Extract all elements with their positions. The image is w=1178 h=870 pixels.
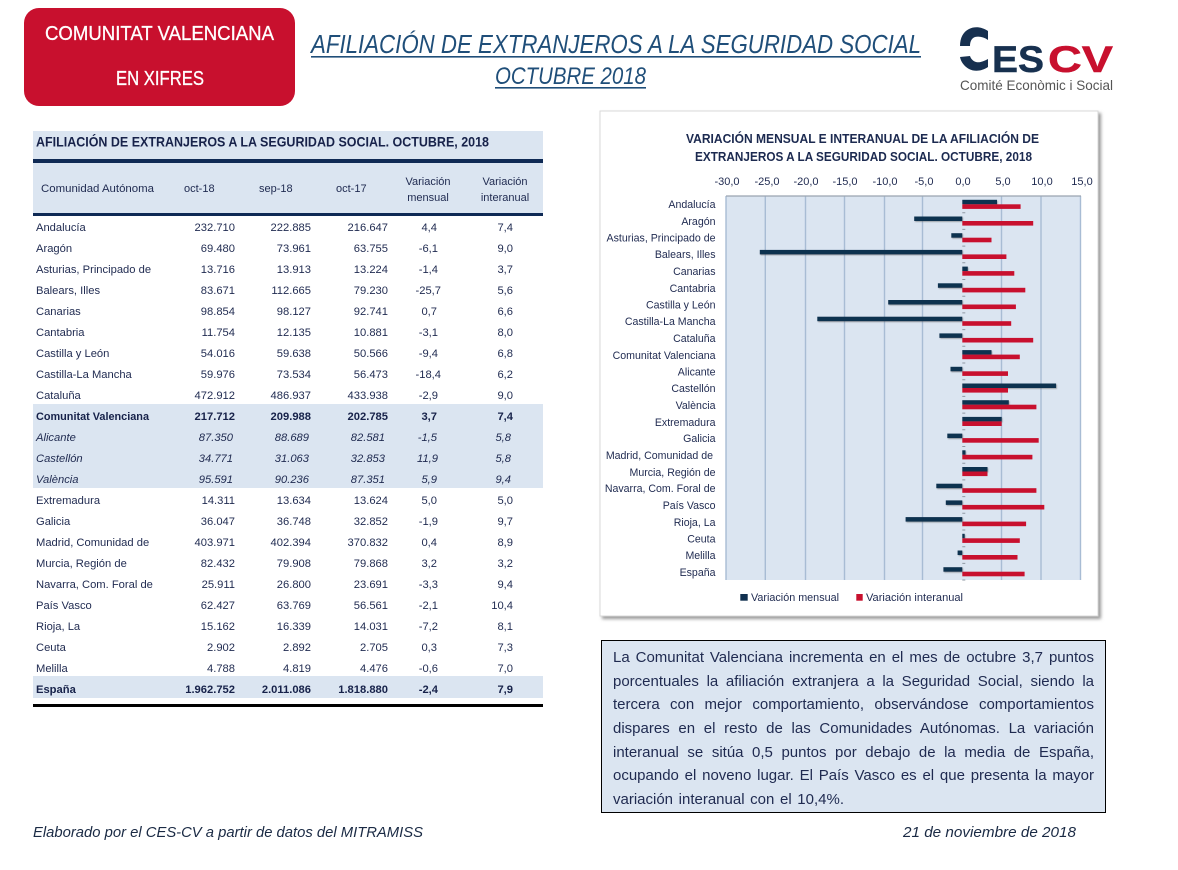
x axis labels: [714, 176, 1093, 188]
row: España: 2.011.086: [262, 684, 311, 696]
x axis labels: -30,0: [714, 176, 740, 188]
row: Balears: -25,7: [416, 285, 441, 297]
row: Castellón: 5,8: [495, 453, 512, 465]
row: Murcia: Murcia, Región de: [36, 558, 127, 570]
panel: data table: [33, 131, 543, 707]
row: Cantabria: 12.135: [277, 327, 311, 339]
row: Castellón: [36, 453, 512, 465]
row: Balears: 83.671: [201, 285, 235, 297]
table column headers: Variación: [405, 176, 451, 188]
category labels: Asturias, Principado de: [607, 232, 716, 244]
category labels: [605, 199, 716, 579]
row: Galicia: 36.047: [201, 516, 235, 528]
logo: CES-CV: ES: [992, 39, 1044, 80]
row: Asturias: [36, 264, 513, 276]
row: Asturias: 13.716: [201, 264, 235, 276]
title: [309, 29, 921, 90]
row: València: València: [36, 474, 78, 486]
table column headers: interanual: [481, 192, 529, 204]
row: Alicante: 88.689: [275, 432, 309, 444]
row: Madrid: Madrid, Comunidad de: [36, 537, 149, 549]
x axis labels: -25,0: [754, 176, 780, 188]
row: Aragón: 9,0: [497, 243, 513, 255]
row: Balears: 112.665: [271, 285, 311, 297]
row: Alicante: 82.581: [351, 432, 385, 444]
row: Balears: Balears, Illes: [36, 285, 100, 297]
row: Canarias: 0,7: [421, 306, 437, 318]
text block: commentary: interanual se sitúa 0,5 puntos por debajo de la media de España,: [613, 744, 1094, 761]
row: Castilla y León: 59.638: [277, 348, 311, 360]
row: Ceuta: 7,3: [497, 642, 513, 654]
row: Navarra: [36, 579, 513, 591]
row: Rioja: Rioja, La: [36, 621, 81, 633]
row: Cantabria: 11.754: [202, 327, 235, 339]
row: Castilla-La Mancha: 73.534: [277, 369, 311, 381]
row: Madrid: 0,4: [421, 537, 437, 549]
row: Castilla y León: 54.016: [201, 348, 235, 360]
row: Cataluña: 486.937: [271, 390, 311, 402]
row: Galicia: 36.748: [277, 516, 311, 528]
row: Cantabria: -3,1: [419, 327, 438, 339]
row: Castilla y León: 6,8: [497, 348, 513, 360]
row: Murcia: 82.432: [201, 558, 235, 570]
category labels: Alicante: [678, 366, 716, 378]
row: Castilla y León: Castilla y León: [36, 348, 109, 360]
row: València: 95.591: [199, 474, 233, 486]
x axis labels: -20,0: [793, 176, 819, 188]
row: Rioja: 15.162: [201, 621, 235, 633]
row: Asturias: Asturias, Principado de: [36, 264, 151, 276]
row: España: -2,4: [419, 684, 439, 696]
category labels: Aragón: [681, 216, 716, 228]
x axis labels: 10,0: [1031, 176, 1053, 188]
table column headers: mensual: [407, 192, 449, 204]
row: Asturias: 13.913: [277, 264, 311, 276]
row: Rioja: -7,2: [419, 621, 438, 633]
row: Andalucía: 4,4: [421, 222, 437, 234]
plot background and grid: [726, 196, 1081, 580]
text block: commentary: dispares en el resto de las Comunidades Autónomas. La variación: [613, 720, 1094, 737]
row: Canarias: 6,6: [497, 306, 513, 318]
table column headers: Comunidad Autónoma: [41, 183, 155, 195]
row: Galicia: -1,9: [419, 516, 438, 528]
row: Melilla: Melilla: [36, 663, 68, 675]
row: Canarias: [36, 306, 513, 318]
row: Castellón: 34.771: [199, 453, 233, 465]
row: País Vasco: -2,1: [419, 600, 438, 612]
category labels: Andalucía: [668, 199, 716, 211]
row: Castilla-La Mancha: -18,4: [416, 369, 441, 381]
row: Melilla: [36, 663, 513, 675]
row: Castilla-La Mancha: Castilla-La Mancha: [36, 369, 133, 381]
row: Rioja: 14.031: [354, 621, 388, 633]
row: Balears: 5,6: [497, 285, 513, 297]
row: Murcia: 79.908: [277, 558, 311, 570]
category labels: Cantabria: [670, 283, 716, 295]
footer: date: 21 de noviembre de 2018: [902, 824, 1077, 841]
badge: Comunitat Valenciana en xifres: COMUNITAT VALENCIANA: [45, 23, 275, 45]
row: País Vasco: 56.561: [354, 600, 388, 612]
row: Canarias: 98.854: [201, 306, 235, 318]
row: Extremadura: 13.624: [354, 495, 388, 507]
title: OCTUBRE 2018: [495, 63, 647, 90]
row: Extremadura: 13.634: [277, 495, 311, 507]
row: Galicia: [36, 516, 513, 528]
row: Andalucía: 232.710: [195, 222, 235, 234]
row: Castilla y León: [36, 348, 513, 360]
row: País Vasco: 62.427: [201, 600, 235, 612]
category labels: València: [676, 400, 716, 412]
badge: Comunitat Valenciana en xifres: EN XIFRES: [116, 68, 204, 90]
row: Navarra: Navarra, Com. Foral de: [36, 579, 153, 591]
category labels: Castellón: [671, 383, 716, 395]
category labels: Navarra, Com. Foral de: [605, 483, 716, 495]
row: España: 1.962.752: [185, 684, 235, 696]
row: València: 90.236: [275, 474, 310, 486]
badge: Comunitat Valenciana en xifres: [24, 8, 295, 106]
table column headers: [33, 159, 543, 216]
table column headers: oct-17: [336, 183, 367, 195]
logo: CES-CV: [960, 27, 1113, 93]
footer: source: Elaborado por el CES-CV a partir de datos del MITRAMISS: [33, 824, 423, 841]
title: AFILIACIÓN DE EXTRANJEROS A LA SEGURIDAD SOCIAL: [309, 29, 921, 59]
row: Canarias: Canarias: [36, 306, 81, 318]
row: Comunitat Valenciana: 217.712: [195, 411, 235, 423]
row: València: [36, 474, 511, 486]
row: Castilla y León: 50.566: [354, 348, 388, 360]
text block: commentary: porcentuales la afiliación extranjera a la Seguridad Social, siendo la: [613, 673, 1094, 690]
row: Navarra: 23.691: [354, 579, 388, 591]
category labels: Melilla: [685, 550, 716, 562]
row: Extremadura: 14.311: [202, 495, 235, 507]
chart title: EXTRANJEROS A LA SEGURIDAD SOCIAL. OCTUBRE, 2018: [695, 150, 1032, 164]
category labels: Castilla y León: [646, 300, 716, 312]
row: Extremadura: Extremadura: [36, 495, 101, 507]
category labels: Rioja, La: [674, 517, 716, 529]
row: Alicante: 87.350: [199, 432, 234, 444]
row: Melilla: 4.819: [283, 663, 311, 675]
row: Cataluña: 433.938: [348, 390, 388, 402]
table column headers: oct-18: [184, 183, 215, 195]
row: Aragón: 73.961: [277, 243, 311, 255]
x axis labels: -15,0: [832, 176, 858, 188]
row: Melilla: 4.476: [360, 663, 388, 675]
row: Alicante: -1,5: [418, 432, 438, 444]
row: Madrid: 370.832: [348, 537, 388, 549]
row: Asturias: -1,4: [419, 264, 438, 276]
x axis labels: 15,0: [1071, 176, 1093, 188]
row: Alicante: [35, 432, 512, 444]
bars: variación interanual: [962, 204, 1044, 576]
row: València: 87.351: [351, 474, 385, 486]
row: Melilla: 7,0: [497, 663, 513, 675]
row: Ceuta: 0,3: [421, 642, 437, 654]
row: Cantabria: [36, 327, 513, 339]
category labels: Comunitat Valenciana: [613, 350, 716, 362]
row: Galicia: 32.852: [354, 516, 388, 528]
row: Navarra: 25.911: [202, 579, 235, 591]
row: Ceuta: [36, 642, 513, 654]
row: España: España: [36, 684, 77, 696]
row: España: 7,9: [497, 684, 513, 696]
row: Cantabria: 8,0: [497, 327, 513, 339]
row: Asturias: 3,7: [497, 264, 513, 276]
highlighted band: Comunitat Valenciana: [33, 404, 543, 488]
row: Ceuta: Ceuta: [36, 642, 67, 654]
chart legend: [740, 592, 963, 604]
category labels: Castilla-La Mancha: [625, 316, 716, 328]
row: Cataluña: 9,0: [497, 390, 513, 402]
row: Aragón: -6,1: [419, 243, 438, 255]
row: Cataluña: -2,9: [419, 390, 438, 402]
category labels: Madrid, Comunidad de: [606, 450, 713, 462]
row: Aragón: 69.480: [201, 243, 235, 255]
row: Rioja: 16.339: [277, 621, 311, 633]
row: Andalucía: 216.647: [348, 222, 388, 234]
row: Rioja: [36, 621, 513, 633]
table closing rule: [33, 704, 543, 707]
category labels: Canarias: [673, 266, 716, 278]
row: Castilla-La Mancha: 59.976: [201, 369, 235, 381]
row: País Vasco: [36, 600, 513, 612]
category labels: Murcia, Región de: [630, 467, 716, 479]
row: Madrid: 8,9: [497, 537, 513, 549]
row: Castellón: 11,9: [417, 453, 438, 465]
row: Ceuta: 2.892: [283, 642, 311, 654]
category labels: País Vasco: [663, 500, 716, 512]
row: Comunitat Valenciana: Comunitat Valenciana: [36, 411, 150, 423]
text block: commentary: variación interanual con el 10,4%.: [613, 791, 844, 808]
text block: commentary: ocupando el noveno lugar. El País Vasco es el que presenta la mayor: [613, 767, 1094, 784]
row: Castilla-La Mancha: [36, 369, 513, 381]
row: España: [36, 684, 513, 696]
row: Navarra: 9,4: [497, 579, 513, 591]
row: Andalucía: Andalucía: [36, 222, 87, 234]
row: Canarias: 92.741: [354, 306, 388, 318]
text block: commentary: tercera con mejor comportamiento, observándose comportamientos: [613, 696, 1094, 713]
row: Cataluña: 472.912: [195, 390, 235, 402]
row: Madrid: [36, 537, 513, 549]
x axis labels: 5,0: [995, 176, 1011, 188]
row: Navarra: 26.800: [277, 579, 311, 591]
category labels: España: [680, 567, 716, 579]
row: Alicante: 5,8: [495, 432, 512, 444]
row: País Vasco: 63.769: [277, 600, 311, 612]
row: Aragón: [36, 243, 513, 255]
row: Madrid: 402.394: [271, 537, 311, 549]
row: Galicia: Galicia: [36, 516, 71, 528]
category labels: Balears, Illes: [655, 249, 716, 261]
row: Castilla-La Mancha: 56.473: [354, 369, 388, 381]
row: País Vasco: País Vasco: [36, 600, 92, 612]
row: Comunitat Valenciana: 209.988: [271, 411, 311, 423]
row: Andalucía: [36, 222, 513, 234]
row: Castellón: 31.063: [275, 453, 310, 465]
row: Comunitat Valenciana: 202.785: [348, 411, 388, 423]
row: Balears: 79.230: [354, 285, 388, 297]
row: Cataluña: Cataluña: [36, 390, 82, 402]
row: País Vasco: 10,4: [491, 600, 513, 612]
row: Asturias: 13.224: [354, 264, 388, 276]
row: Canarias: 98.127: [277, 306, 311, 318]
row: Navarra: -3,3: [419, 579, 438, 591]
row: València: 5,9: [421, 474, 437, 486]
chart title: [686, 131, 1039, 164]
category labels: Cataluña: [673, 333, 716, 345]
row: Rioja: 8,1: [497, 621, 513, 633]
row: Castellón: Castellón: [36, 453, 83, 465]
row: Extremadura: [36, 495, 513, 507]
row: Cataluña: [36, 390, 513, 402]
chart title: VARIACIÓN MENSUAL E INTERANUAL DE LA AFILIACIÓN DE: [686, 131, 1039, 146]
row: Aragón: 63.755: [354, 243, 388, 255]
logo: CES-CV: Comité Econòmic i Social: [960, 77, 1113, 93]
table column headers: Variación: [482, 176, 528, 188]
row: Extremadura: 5,0: [497, 495, 513, 507]
row: Balears: [36, 285, 513, 297]
panel: bar chart: [600, 111, 1098, 616]
row: Melilla: -0,6: [419, 663, 438, 675]
row: Ceuta: 2.902: [207, 642, 235, 654]
row: Extremadura: 5,0: [421, 495, 437, 507]
row: Madrid: 403.971: [195, 537, 235, 549]
row: España: 1.818.880: [338, 684, 388, 696]
logo: CES-CV: CV: [1048, 39, 1113, 80]
text block: commentary: La Comunitat Valenciana incrementa en el mes de octubre 3,7 puntos: [613, 649, 1094, 666]
row: Comunitat Valenciana: 7,4: [497, 411, 514, 423]
row: València: 9,4: [495, 474, 511, 486]
table column headers: sep-18: [259, 183, 293, 195]
chart legend: Variación mensual: [751, 592, 839, 604]
row: Murcia: 3,2: [497, 558, 513, 570]
row: Castellón: 32.853: [351, 453, 386, 465]
category labels: Extremadura: [655, 417, 716, 429]
row: Murcia: [36, 558, 513, 570]
row: Murcia: 3,2: [421, 558, 437, 570]
category labels: Galicia: [683, 433, 716, 445]
row: Castilla y León: -9,4: [419, 348, 438, 360]
category labels: Ceuta: [687, 534, 716, 546]
row: Galicia: 9,7: [497, 516, 513, 528]
chart legend: Variación interanual: [866, 592, 963, 604]
row: Aragón: Aragón: [36, 243, 72, 255]
bars: variación mensual: [760, 200, 1056, 572]
text block: commentary: [601, 640, 1106, 813]
row: Castilla-La Mancha: 6,2: [497, 369, 513, 381]
x axis labels: 0,0: [955, 176, 971, 188]
row: Murcia: 79.868: [354, 558, 388, 570]
row: Andalucía: 7,4: [497, 222, 513, 234]
highlighted band: España: [33, 676, 543, 698]
row: Andalucía: 222.885: [271, 222, 311, 234]
x axis labels: -10,0: [872, 176, 898, 188]
row: Comunitat Valenciana: 3,7: [421, 411, 437, 423]
row: Melilla: 4.788: [207, 663, 235, 675]
row: Comunitat Valenciana: [36, 411, 514, 423]
row: Cantabria: 10.881: [354, 327, 388, 339]
row: Ceuta: 2.705: [360, 642, 388, 654]
row: Cantabria: Cantabria: [36, 327, 85, 339]
x axis labels: -5,0: [915, 176, 933, 188]
row: Alicante: Alicante: [35, 432, 76, 444]
table heading: AFILIACIÓN DE EXTRANJEROS A LA SEGURIDAD SOCIAL. OCTUBRE, 2018: [36, 132, 489, 150]
table heading: [33, 131, 543, 159]
